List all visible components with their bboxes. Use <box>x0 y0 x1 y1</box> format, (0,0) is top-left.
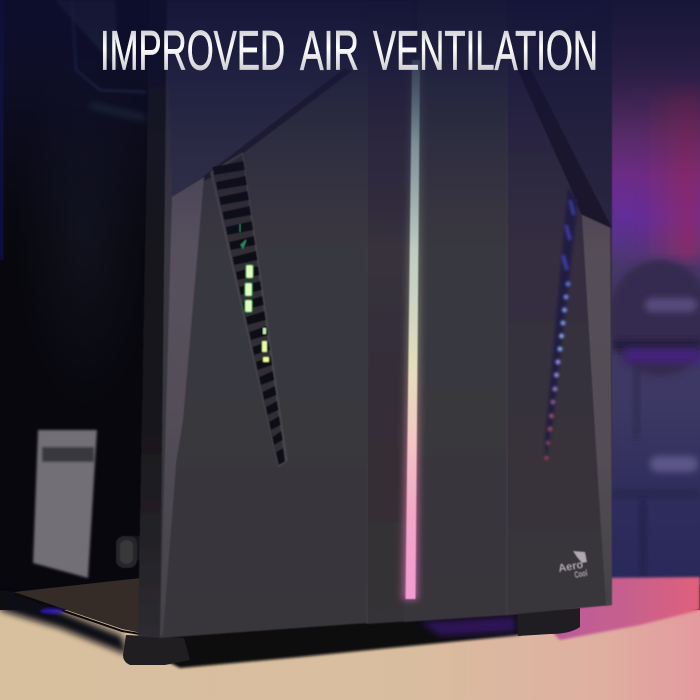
logo bird mark <box>573 551 587 563</box>
left textured triangle <box>160 177 204 637</box>
title: IMPROVED <box>100 18 285 82</box>
glass base plate <box>0 578 141 655</box>
thumbscrew <box>116 536 142 568</box>
face section: centre-left <box>366 0 412 624</box>
background: wooden floor <box>0 577 700 700</box>
upper-left darker facet <box>167 0 366 197</box>
PC case front panel <box>138 0 612 638</box>
blurred spec card behind glass <box>33 430 97 578</box>
case body backing <box>138 0 612 638</box>
face section: centre-right <box>404 0 507 622</box>
RGB light strip glow <box>402 60 423 600</box>
logo wordmark: Aero <box>557 559 584 575</box>
title: AIR <box>300 18 359 82</box>
background: purple right wall <box>605 0 700 585</box>
title <box>100 18 598 82</box>
face section: right <box>507 0 612 615</box>
right vent slit <box>544 188 578 460</box>
RGB light strip <box>406 60 420 599</box>
left vent slit <box>210 152 288 468</box>
case left edge <box>138 0 168 637</box>
panel seams <box>367 60 507 623</box>
right textured triangle <box>582 215 612 606</box>
background: dark glass side panel <box>0 0 170 640</box>
right foot <box>517 608 580 636</box>
upper-right dark wedge <box>513 0 612 228</box>
left foot <box>123 635 190 665</box>
blue and red vent lights <box>544 200 574 460</box>
under-case shadow <box>125 612 545 668</box>
green RGB light through vent <box>240 224 269 362</box>
diagonal crease <box>172 68 352 197</box>
logo sub wordmark: Cool <box>574 568 588 580</box>
purple light under the case <box>420 616 516 636</box>
AeroCool logo <box>557 551 588 580</box>
face section: left <box>160 0 367 638</box>
